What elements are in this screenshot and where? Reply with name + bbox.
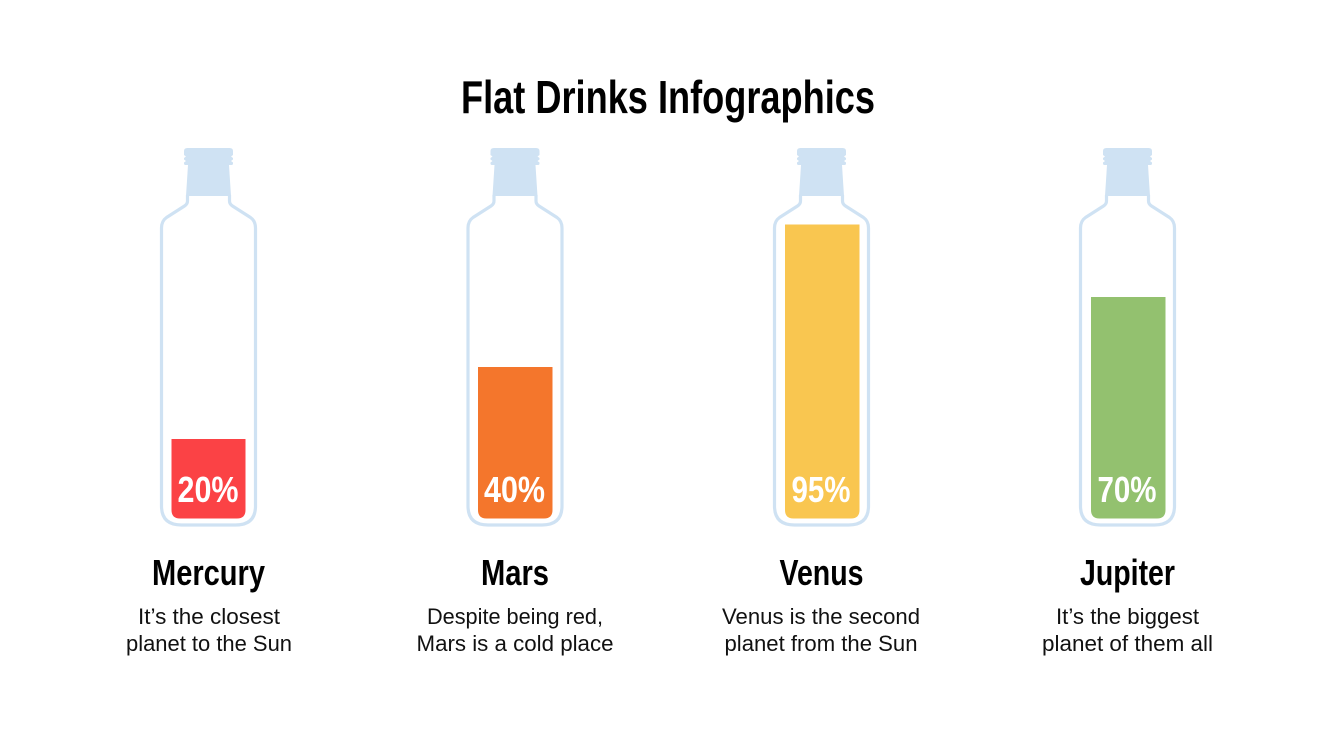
title: Flat Drinks Infographics <box>461 71 875 123</box>
icon: Mercury bottle <box>162 148 256 525</box>
text: Venus description: Venus is the second <box>722 604 920 629</box>
heading: Jupiter: Jupiter <box>1080 552 1175 593</box>
text: Mercury description: It’s the closest <box>138 604 280 629</box>
value: Mars: 40% <box>484 469 545 510</box>
text: Jupiter description: planet of them all <box>1042 631 1213 656</box>
text: Mercury description: planet to the Sun <box>126 631 292 656</box>
fill level: Mercury 20% <box>172 439 246 518</box>
fill level: Jupiter 70% <box>1091 297 1166 518</box>
icon: Venus bottle <box>774 148 868 525</box>
icon: Jupiter bottle <box>1080 148 1174 525</box>
fill level: Mars 40% <box>478 367 552 518</box>
value: Mercury: 20% <box>178 469 238 510</box>
heading: Venus: Venus <box>780 552 864 593</box>
heading: Mars: Mars <box>481 552 549 593</box>
text: Venus description: planet from the Sun <box>724 631 918 656</box>
value: Venus: 95% <box>792 469 850 510</box>
panel: Mercury <box>126 148 292 656</box>
text: Mars description: Mars is a cold place <box>416 631 614 656</box>
icon: Mars bottle <box>468 148 562 525</box>
heading: Mercury: Mercury <box>152 552 265 593</box>
value: Jupiter: 70% <box>1098 469 1156 510</box>
panel: Venus <box>722 148 920 656</box>
fill level: Venus 95% <box>785 224 860 518</box>
panel: Mars <box>416 148 614 656</box>
text: Mars description: Despite being red, <box>427 604 603 629</box>
panel: Jupiter <box>1042 148 1213 656</box>
text: Jupiter description: It’s the biggest <box>1056 604 1199 629</box>
